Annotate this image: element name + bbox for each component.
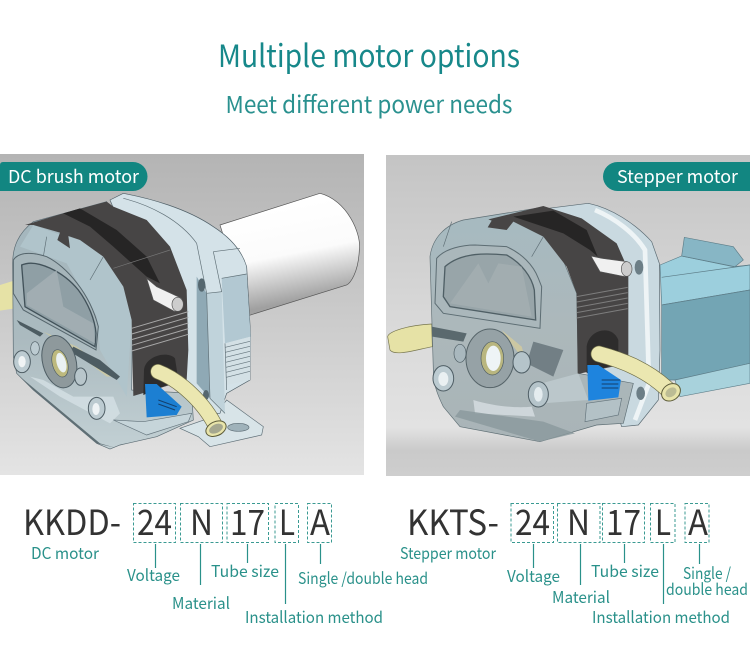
code text KKDD: KKDD- [23,495,121,546]
face [430,207,633,442]
code text KKTS: KKTS- [407,495,499,546]
label: Voltage: Voltage [127,562,180,586]
leader lines [156,544,320,604]
label: Installation method: Installation method [245,604,383,628]
label: Stepper motor: Stepper motor [400,540,497,564]
back plate [110,193,251,413]
code box 17: 17 [230,495,265,546]
code box A: A [310,495,331,546]
title: Multiple motor options [218,31,520,76]
label: Voltage: Voltage [507,563,560,587]
code box 17: 17 [606,495,641,546]
code box L: L [279,495,295,546]
window [13,253,98,350]
code box N: N [567,495,590,546]
code box 24: 24 [137,495,172,546]
leader lines [534,544,700,604]
model code: KKDD [23,495,428,628]
label: Material: Material [552,584,610,608]
window [435,245,542,328]
badge: DC brush motor: DC brush motor [8,163,140,189]
back plate [548,203,660,427]
tube [158,372,217,428]
code box N [180,495,222,546]
blue clip [145,384,182,417]
illustration: stepper motor pump [388,203,750,442]
label: Single / double head: Single / [683,560,732,584]
peristaltic band [488,206,628,374]
model code: KKTS [400,495,748,628]
illustration: DC brush motor pump [0,193,360,449]
motor [660,256,750,305]
code box 24: 24 [515,495,550,546]
label: Tube size: Tube size [211,558,279,582]
code box A: A [688,495,709,546]
badge: Stepper motor: Stepper motor [617,163,739,189]
code box N [558,495,600,546]
label: Installation method: Installation method [592,604,730,628]
peristaltic band [25,202,188,396]
face [13,202,193,449]
foot [180,400,263,447]
panel: Stepper motor image [386,155,750,476]
left tube [388,324,432,353]
label: Single / double head [666,560,748,600]
blue clip [587,365,621,401]
label: Tube size: Tube size [591,558,659,582]
tube [599,354,670,392]
label: Material: Material [172,590,230,614]
label: DC motor: DC motor [31,540,100,564]
panel: DC brush motor image [0,154,364,475]
code box L: L [655,495,671,546]
subtitle: Meet different power needs [226,86,512,120]
code box N: N [190,495,213,546]
label: Single /double head: Single /double head [298,565,428,589]
